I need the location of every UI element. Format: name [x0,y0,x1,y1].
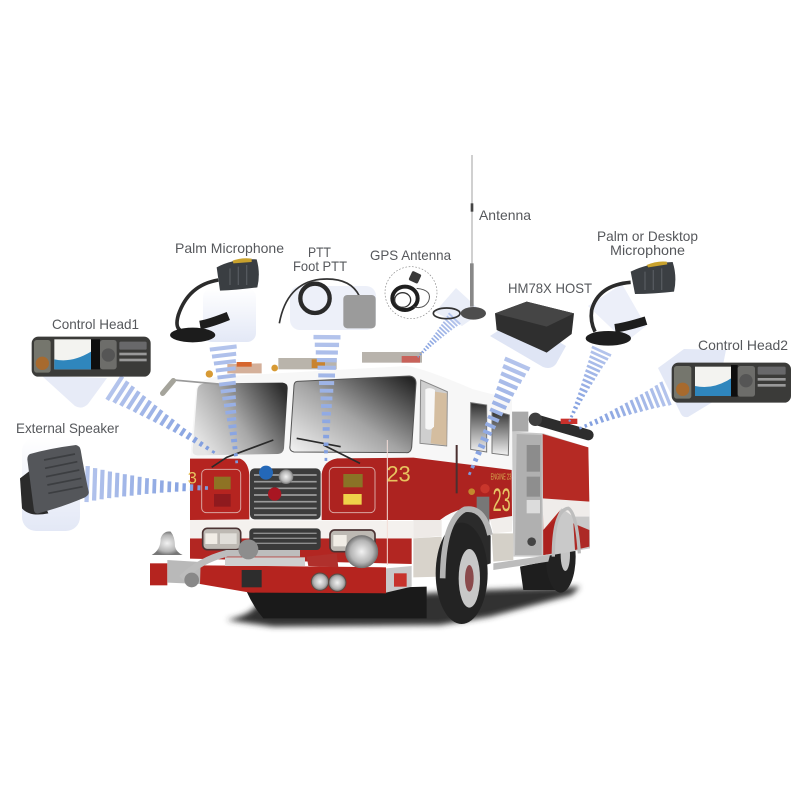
label: palm or desktop microphone [597,228,698,258]
cab numbers: 3 [188,468,197,487]
icon: HM78X host [495,302,574,353]
pale backdrops behind the accessories [22,284,726,531]
front wheel [436,508,491,624]
fire truck: ENGINE 23 [491,471,511,481]
right light cluster [329,467,375,513]
signal beam: GPS antenna [412,312,461,363]
side window with driver [420,380,447,446]
rear body and pump panel [492,412,590,570]
signal beam: palm microphone [210,344,250,465]
icon: foot PTT pedal [279,279,376,328]
label: GPS antenna: GPS Antenna [370,247,451,263]
label: PTT and foot PTT: Foot PTT [293,258,347,274]
cab numbers: 23 [386,461,411,486]
cab numbers: 23 [493,481,511,518]
icon: GPS antenna [385,267,437,319]
signal beam: external speaker [84,466,209,506]
right windshield [290,376,416,453]
fire truck [150,352,590,627]
label: control head 2: Control Head2 [698,337,788,353]
hose on top [529,413,588,435]
label: PTT and foot PTT: PTT [308,244,331,260]
cab numbers [188,461,511,518]
label: palm or desktop microphone: Palm or Desktop [597,228,698,244]
signal beam: desktop microphone [560,346,612,426]
left windshield [193,383,288,455]
signal beam: HM78X host [457,357,530,480]
roof lights [206,352,422,378]
ground shadow [227,587,580,627]
label: external speaker: External Speaker [16,420,119,436]
door windows [471,403,509,455]
left light cluster [202,469,241,513]
red cab panels [190,440,512,565]
label: antenna: Antenna [479,207,531,223]
lower grille [249,528,321,550]
front bumper [150,560,412,593]
label: HM78X host: HM78X HOST [508,280,592,296]
chassis underside [247,587,427,618]
label: palm microphone: Palm Microphone [175,240,284,256]
icon: desktop microphone [586,261,675,346]
signal beam: foot PTT [312,335,340,461]
label: control head 1: Control Head1 [52,316,139,332]
side mirror [163,380,218,393]
icon: antenna [433,155,486,320]
label: palm or desktop microphone: Microphone [610,242,685,258]
label: PTT and foot PTT [293,244,347,274]
cab white upper [190,366,513,520]
hose, bell and siren [152,532,378,587]
front step panel [413,537,442,577]
upper grille with lights [250,466,321,519]
headlights [203,528,375,552]
icon: external speaker [20,445,89,515]
wipers [212,438,360,467]
icon: palm microphone [170,258,259,342]
signal beam: control head 2 [575,381,672,440]
icon: control head 2 [672,363,791,403]
icon: control head 1 [32,337,151,377]
signal beam: control head 1 [105,375,222,464]
rear wheel [520,521,576,593]
